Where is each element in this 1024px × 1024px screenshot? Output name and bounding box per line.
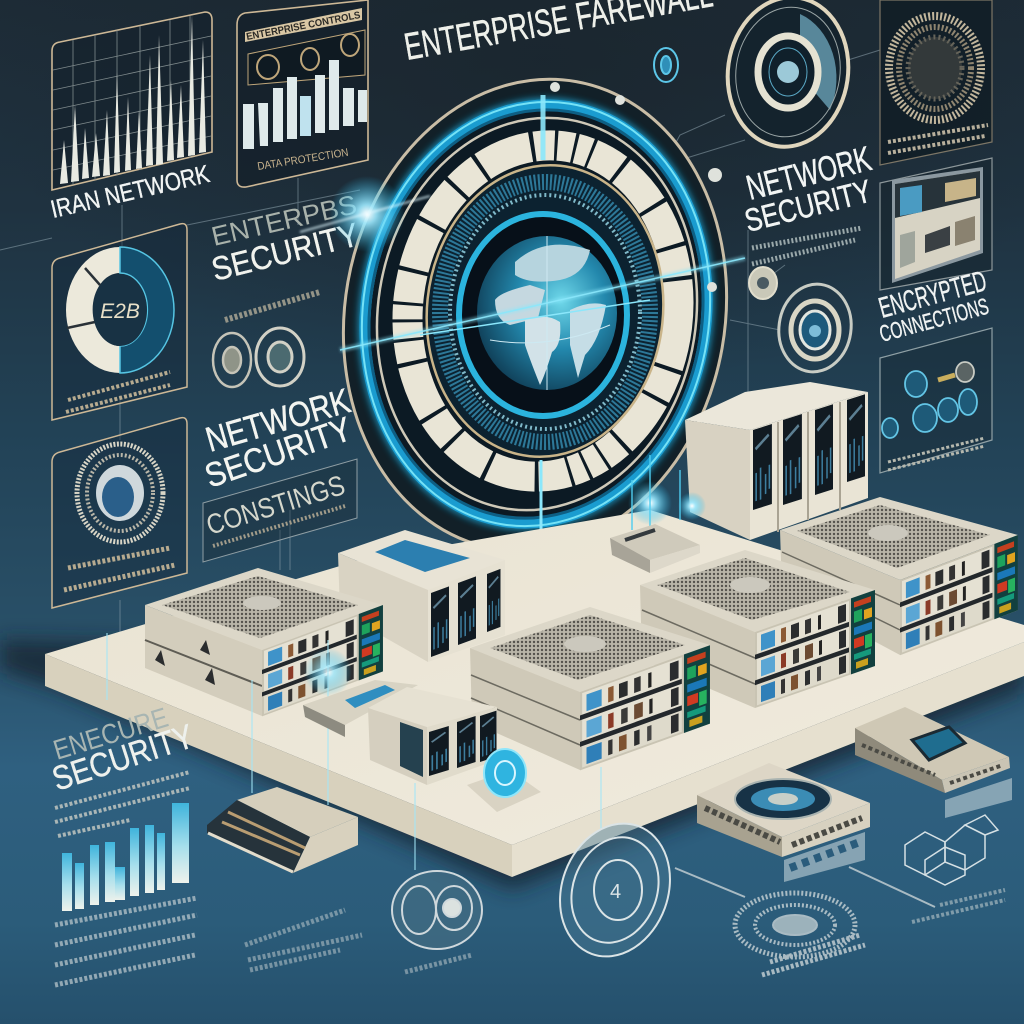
panel: enterprise security	[208, 189, 362, 387]
panel: dashboard screen	[880, 158, 992, 290]
panel: encrypted connections	[880, 328, 992, 473]
inner dark data ring	[412, 153, 678, 469]
label: Network Security right: SECURITY	[741, 173, 875, 239]
icon: small ring	[749, 267, 777, 299]
hologram sphere	[392, 871, 482, 949]
main firewall ring	[307, 49, 763, 590]
car shaped device	[855, 707, 1010, 793]
donut label: E2B	[100, 300, 140, 323]
server stack B	[338, 530, 505, 662]
panel: network security left: NETWORK	[201, 381, 354, 460]
icon: lens left	[213, 333, 251, 387]
hologram ring: 4	[610, 881, 621, 903]
chart spikes	[60, 15, 206, 184]
blue ring around globe	[459, 214, 627, 416]
outer thin ring	[307, 49, 763, 581]
label: Network Security right	[741, 139, 875, 264]
hologram ring	[542, 808, 688, 972]
panel: enterprise security: SECURITY	[208, 216, 362, 288]
small icon: ring top	[654, 48, 678, 82]
panel: fingerprint sphere	[880, 0, 992, 165]
panel: network security left	[200, 381, 357, 562]
hexagon network	[905, 815, 998, 885]
small device left	[303, 680, 418, 737]
book reflection lines	[245, 910, 472, 972]
label: Network Security right: NETWORK	[743, 139, 875, 208]
label: Enecure Security: ENECURE	[50, 702, 172, 766]
panel: seal	[52, 418, 187, 608]
beams and sparks	[628, 455, 706, 540]
icon: target ring	[773, 279, 857, 377]
small device behind	[610, 524, 700, 573]
ring icon: top right	[718, 0, 858, 155]
glowing blue ring	[335, 80, 737, 548]
panel: network security left: CONSTINGS	[203, 469, 349, 541]
ring nodes	[550, 82, 722, 292]
hexagon caption lines	[912, 890, 1005, 922]
panel: bar chart	[237, 0, 368, 187]
panel: bar chart: ENTERPRISE CONTROLS	[245, 10, 362, 43]
tower servers	[685, 382, 868, 540]
server stack A	[145, 568, 383, 716]
panel: E2B donut	[52, 224, 187, 420]
donut left	[66, 247, 120, 373]
server stack E	[780, 497, 1018, 655]
reflected caption lines	[55, 898, 197, 985]
label: Encrypted Connections	[876, 265, 991, 347]
platform	[45, 510, 1024, 877]
label: Enecure Security: SECURITY	[48, 717, 198, 799]
icons strip	[248, 30, 365, 85]
icon: lens right	[256, 328, 304, 386]
device reflections	[784, 778, 1012, 882]
server stack C	[470, 607, 710, 770]
globe	[477, 236, 617, 390]
server stack D	[640, 550, 875, 708]
light streaks	[340, 95, 745, 590]
book device	[207, 787, 358, 873]
cream segment ring	[389, 130, 697, 492]
bars	[243, 60, 367, 149]
connector lines	[0, 50, 880, 640]
shield icon on pedestal	[467, 749, 541, 812]
panel: network security left: SECURITY	[200, 410, 356, 496]
panel: network chart	[52, 12, 212, 190]
label: Iran Network: IRAN NETWORK	[48, 160, 212, 224]
label: Enecure Security	[48, 702, 198, 836]
panel heading	[245, 8, 362, 42]
caption: DATA PROTECTION	[257, 147, 349, 173]
small server box	[368, 687, 497, 785]
flare	[300, 176, 430, 252]
glow beam on stack A	[107, 633, 601, 870]
small device right	[697, 763, 870, 857]
chart grid	[53, 16, 211, 185]
panel: enterprise security: ENTERPBS	[209, 189, 360, 252]
reflected bar chart	[62, 803, 189, 911]
donut right	[120, 247, 174, 373]
reflected fingerprint	[675, 867, 935, 975]
ring glow	[335, 80, 737, 548]
